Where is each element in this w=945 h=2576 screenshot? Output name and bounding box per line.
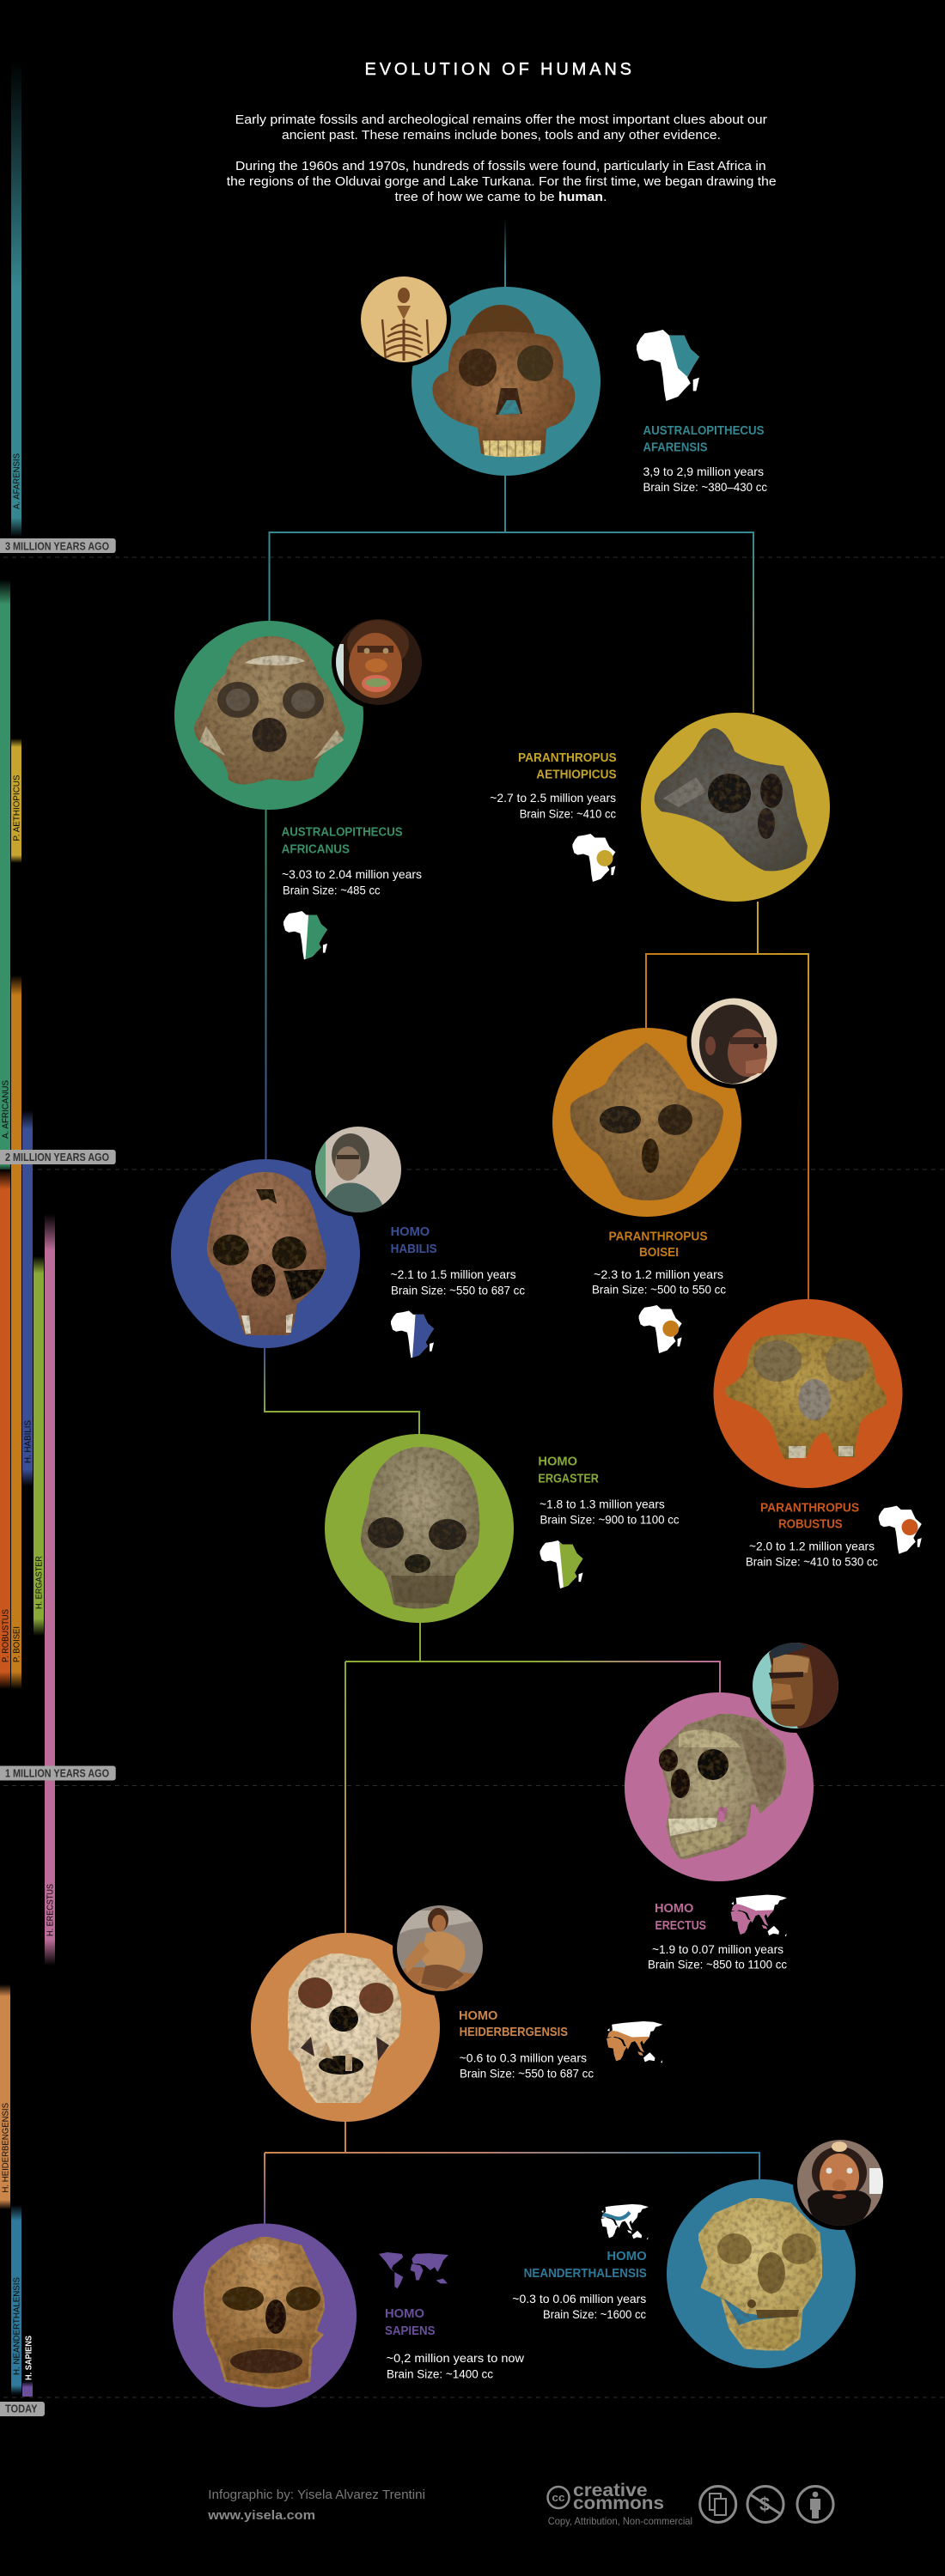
name bbox=[459, 2009, 568, 2039]
facts bbox=[490, 791, 616, 821]
skull bbox=[288, 1953, 401, 2103]
facts: Brain Size: ~1600 cc bbox=[543, 2307, 646, 2321]
name: HOMO bbox=[655, 1902, 693, 1916]
name: ERECTUS bbox=[655, 1919, 706, 1933]
facts: ~3.03 to 2.04 million years bbox=[282, 867, 422, 881]
name: AUSTRALOPITHECUS bbox=[282, 826, 403, 840]
label: 2 million years ago: 2 MILLION YEARS AGO bbox=[5, 1151, 109, 1163]
intro text: tree of how we came to be human. bbox=[395, 190, 607, 204]
name: ERGASTER bbox=[538, 1472, 599, 1485]
panel: Paranthropus aethiopicus bbox=[490, 713, 830, 902]
bar: H. heidelbergensis: H. HEIDERBENGENSIS bbox=[2, 2103, 10, 2193]
facts: ~0.6 to 0.3 million years bbox=[460, 2050, 587, 2064]
facts: Brain Size: ~900 to 1100 cc bbox=[540, 1513, 679, 1527]
name bbox=[385, 2307, 436, 2338]
facts: Brain Size: ~410 cc bbox=[520, 807, 616, 821]
facts: Brain Size: ~485 cc bbox=[283, 883, 381, 896]
footer credit bbox=[207, 2488, 425, 2523]
skull bbox=[659, 1714, 786, 1859]
skull bbox=[207, 1172, 326, 1335]
facts: ~1.9 to 0.07 million years bbox=[652, 1942, 783, 1956]
bar: P. boisei bbox=[11, 975, 22, 1689]
panel: Paranthropus boisei bbox=[552, 994, 782, 1353]
facts: Brain Size: ~850 to 1100 cc bbox=[648, 1957, 787, 1971]
name bbox=[518, 751, 617, 782]
facts: ~0,2 million years to now bbox=[387, 2351, 525, 2365]
circle bbox=[641, 713, 830, 902]
timeline bars bbox=[0, 61, 55, 2397]
name bbox=[391, 1225, 437, 1256]
portrait: reconstruction bbox=[687, 994, 782, 1089]
skull bbox=[204, 2237, 325, 2389]
panel: Australopithecus afarensis bbox=[357, 272, 767, 494]
name: AFRICANUS bbox=[282, 843, 350, 857]
facts bbox=[391, 1267, 525, 1297]
bar: H. neanderthalensis bbox=[11, 2205, 22, 2395]
icon: non-commercial bbox=[747, 2487, 783, 2523]
panel: Australopithecus africanus bbox=[174, 615, 426, 960]
name: HOMO bbox=[385, 2307, 424, 2321]
facts bbox=[282, 867, 422, 896]
label: 3 million years ago: 3 MILLION YEARS AGO bbox=[5, 539, 109, 553]
map: Africa, east half bbox=[540, 1540, 585, 1589]
skull bbox=[698, 2198, 822, 2351]
portrait: reconstruction bbox=[311, 1122, 405, 1217]
map: world bbox=[379, 2252, 448, 2288]
bar: H. neanderthalensis: H. NEANDERTHALENSIS bbox=[12, 2277, 22, 2375]
map: Old World bbox=[607, 2021, 662, 2064]
name: HOMO bbox=[459, 2009, 497, 2023]
skull bbox=[570, 1042, 723, 1200]
name: HABILIS bbox=[391, 1242, 437, 1256]
facts bbox=[512, 2292, 646, 2321]
name bbox=[538, 1455, 599, 1485]
label: 1 million years ago: 1 MILLION YEARS AGO bbox=[5, 1767, 109, 1779]
name: BOISEI bbox=[639, 1246, 679, 1260]
facts: ~2.0 to 1.2 million years bbox=[749, 1540, 875, 1553]
bar: H. habilis: H. HABILIS bbox=[24, 1420, 33, 1463]
map: Africa, east spot bbox=[639, 1305, 682, 1353]
name: AUSTRALOPITHECUS bbox=[643, 424, 765, 438]
map: Old World bbox=[730, 1895, 787, 1938]
name bbox=[608, 1230, 708, 1260]
tree connector lines bbox=[264, 218, 808, 2224]
skull bbox=[725, 1333, 887, 1460]
facts bbox=[540, 1498, 679, 1527]
footer credit: www.yisela.com bbox=[207, 2508, 315, 2523]
facts: ~0.3 to 0.06 million years bbox=[512, 2292, 646, 2306]
creative commons logo: commons bbox=[573, 2494, 664, 2513]
creative commons logo: Copy, Attribution, Non-commercial bbox=[548, 2515, 692, 2527]
name: HOMO bbox=[391, 1225, 430, 1239]
name: AETHIOPICUS bbox=[536, 769, 617, 782]
map: Old World, band bbox=[601, 2204, 649, 2240]
creative commons logo: cc bbox=[552, 2491, 565, 2504]
skull bbox=[432, 305, 575, 457]
name bbox=[524, 2250, 647, 2281]
intro text: ancient past. These remains include bones, tools and any other evidence. bbox=[282, 128, 721, 143]
facts: Brain Size: ~410 to 530 cc bbox=[746, 1554, 878, 1568]
name bbox=[643, 424, 765, 455]
name: PARANTHROPUS bbox=[760, 1502, 859, 1516]
creative commons logo: creative bbox=[573, 2481, 648, 2500]
name: PARANTHROPUS bbox=[608, 1230, 708, 1243]
circle bbox=[667, 2179, 856, 2368]
name bbox=[760, 1502, 859, 1532]
circle bbox=[552, 1028, 741, 1217]
skull bbox=[655, 728, 808, 871]
bar: P. aethiopicus bbox=[11, 738, 22, 863]
intro text: During the 1960s and 1970s, hundreds of fossils were found, particularly in East Africa in bbox=[235, 159, 766, 173]
icon: attribution bbox=[797, 2487, 833, 2523]
name bbox=[282, 826, 403, 857]
bar: H. ergaster: H. ERGASTER bbox=[34, 1556, 45, 1609]
name: AFARENSIS bbox=[643, 441, 708, 455]
bar: A. africanus: A. AFRICANUS bbox=[2, 1080, 10, 1139]
portrait: reconstruction bbox=[749, 1643, 838, 1733]
facts bbox=[387, 2351, 525, 2380]
intro text bbox=[227, 112, 777, 204]
map: Africa, east spot bbox=[879, 1506, 922, 1554]
bar: A. afarensis bbox=[11, 61, 22, 537]
map: Africa, east half bbox=[284, 911, 330, 960]
name: NEANDERTHALENSIS bbox=[524, 2267, 647, 2281]
bar: H. habilis bbox=[22, 1110, 33, 1486]
skull bbox=[194, 636, 344, 784]
panel: Homo erectus bbox=[625, 1638, 843, 1971]
circle bbox=[625, 1692, 814, 1881]
facts: Brain Size: ~500 to 550 cc bbox=[592, 1283, 726, 1297]
time scale dashed lines bbox=[3, 557, 945, 2397]
title: EVOLUTION OF HUMANS bbox=[364, 60, 631, 79]
name: PARANTHROPUS bbox=[518, 751, 617, 765]
intro text: Early primate fossils and archeological remains offer the most important clues about our bbox=[235, 112, 767, 127]
bar: P. boisei: P. BOISEI bbox=[12, 1626, 22, 1662]
facts bbox=[460, 2050, 594, 2081]
intro text: the regions of the Olduvai gorge and Lake Turkana. For the first time, we began drawing the bbox=[227, 174, 777, 189]
panel: Paranthropus robustus bbox=[713, 1299, 922, 1568]
panel: Homo ergaster bbox=[325, 1434, 679, 1623]
facts bbox=[746, 1540, 878, 1568]
icon: copy bbox=[700, 2487, 736, 2523]
bar: P. aethiopicus: P. AETHIOPICUS bbox=[12, 775, 22, 841]
name: SAPIENS bbox=[385, 2324, 436, 2338]
circle bbox=[325, 1434, 514, 1623]
portrait: reconstruction bbox=[332, 619, 422, 707]
bar: H. erectus: H. ERECSTUS bbox=[46, 1884, 55, 1936]
bar: H. sapiens: H. SAPIENS bbox=[24, 2336, 34, 2380]
name: HOMO bbox=[538, 1455, 577, 1469]
facts: ~1.8 to 1.3 million years bbox=[540, 1498, 665, 1511]
bar: H. heidelbergensis bbox=[0, 1984, 10, 2209]
facts bbox=[648, 1942, 787, 1971]
footer credit: Infographic by: Yisela Alvarez Trentini bbox=[208, 2488, 425, 2502]
circle bbox=[713, 1299, 902, 1488]
circle bbox=[173, 2224, 357, 2408]
creative commons logo bbox=[548, 2481, 692, 2527]
name: HEIDERBERGENSIS bbox=[460, 2026, 568, 2039]
label: today: TODAY bbox=[5, 2403, 38, 2415]
circle bbox=[171, 1159, 360, 1348]
bar: P. robustus: P. ROBUSTUS bbox=[2, 1609, 10, 1662]
bar: A. afarensis: A. AFARENSIS bbox=[12, 453, 22, 509]
facts: Brain Size: ~1400 cc bbox=[387, 2366, 493, 2380]
facts: Brain Size: ~550 to 687 cc bbox=[391, 1284, 525, 1297]
facts: ~2.7 to 2.5 million years bbox=[490, 791, 616, 805]
facts: ~2.1 to 1.5 million years bbox=[391, 1267, 516, 1281]
facts bbox=[643, 465, 767, 494]
bar: A. africanus bbox=[0, 580, 10, 1172]
circle bbox=[251, 1933, 440, 2122]
skull bbox=[361, 1447, 479, 1608]
portrait: reconstruction bbox=[393, 1901, 487, 1996]
name: HOMO bbox=[607, 2250, 647, 2263]
icon: non-commercial: $ bbox=[759, 2494, 770, 2515]
panel: Homo neanderthalensis bbox=[512, 2136, 887, 2368]
bar: H. ergaster bbox=[34, 1256, 45, 1636]
facts bbox=[592, 1267, 726, 1297]
portrait: fossil skeleton bbox=[357, 272, 451, 367]
panel: Homo habilis bbox=[171, 1122, 525, 1358]
map: Africa, east half bbox=[391, 1310, 436, 1358]
portrait: reconstruction bbox=[793, 2136, 887, 2230]
panel: Homo heidelbergensis bbox=[251, 1901, 662, 2122]
map: Africa, east bbox=[637, 330, 703, 401]
facts: 3,9 to 2,9 million years bbox=[643, 465, 764, 478]
bar: P. robustus bbox=[0, 1170, 10, 1689]
circle bbox=[412, 287, 601, 476]
name: ROBUSTUS bbox=[778, 1518, 843, 1532]
panel: Homo sapiens bbox=[173, 2224, 525, 2408]
facts: ~2.3 to 1.2 million years bbox=[594, 1267, 723, 1281]
facts: Brain Size: ~550 to 687 cc bbox=[460, 2067, 594, 2081]
bar: H. erectus bbox=[45, 1214, 55, 1965]
facts: Brain Size: ~380–430 cc bbox=[643, 480, 767, 494]
map: Africa, east spot bbox=[572, 834, 615, 882]
circle bbox=[174, 621, 363, 810]
bar: H. sapiens bbox=[22, 2336, 34, 2397]
name bbox=[655, 1902, 706, 1933]
